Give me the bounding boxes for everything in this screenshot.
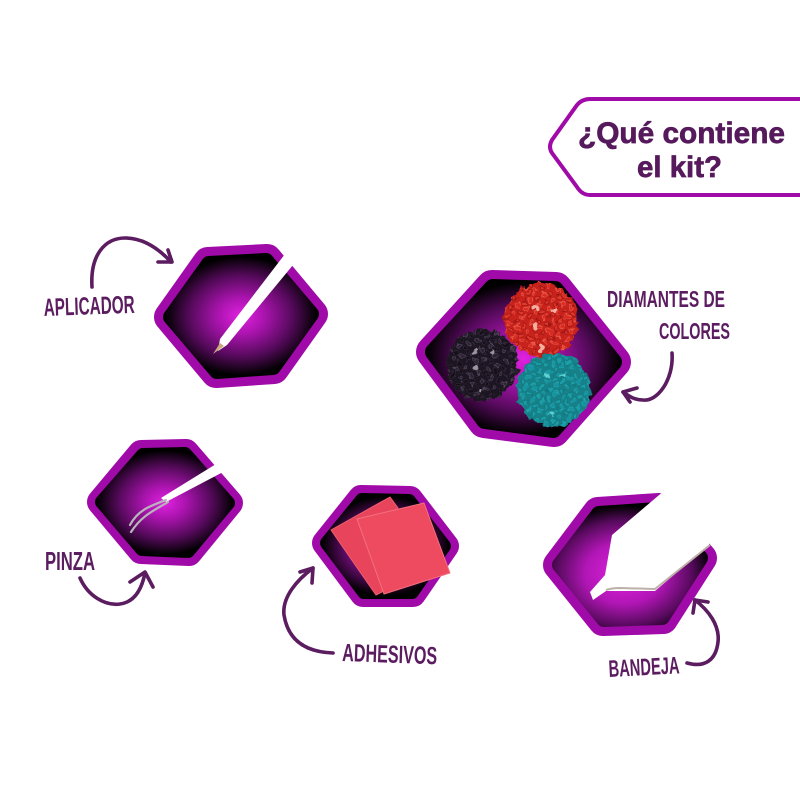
panel: diamantes de colores: COLORES <box>659 318 730 344</box>
icon: tweezers <box>130 464 225 532</box>
icon: front adhesive sheet <box>357 503 450 594</box>
label: ADHESIVOS <box>342 639 438 670</box>
tray edge <box>606 545 710 590</box>
hexagon frame <box>558 508 702 621</box>
panel: diamantes de colores <box>432 283 730 431</box>
arrow <box>80 572 153 604</box>
hexagon frame <box>325 498 446 594</box>
panel: aplicador <box>43 238 313 373</box>
hexagon glow <box>560 510 700 619</box>
icon: red gems <box>504 283 578 357</box>
hexagon glow <box>327 500 444 592</box>
panel: pinza <box>45 452 230 604</box>
label: BANDEJA <box>608 652 680 683</box>
label: PINZA <box>45 546 95 576</box>
icon: applicator pen <box>213 254 293 354</box>
arrow <box>623 353 672 402</box>
hexagon glow <box>102 454 228 551</box>
hexagon frame <box>169 259 313 373</box>
icon: white tray <box>590 480 722 600</box>
arrow <box>284 568 333 653</box>
label: APLICADOR <box>43 291 135 322</box>
arrow <box>687 600 718 664</box>
hexagon frame <box>432 286 615 431</box>
panel: bandeja <box>558 480 722 683</box>
icon: back adhesive sheet <box>331 497 398 595</box>
hexagon frame <box>100 452 230 553</box>
heading: ¿Qué contiene <box>578 117 785 150</box>
title banner: el kit? <box>637 151 722 184</box>
icon: teal gems <box>517 353 591 427</box>
title banner <box>550 99 800 195</box>
hexagon glow <box>434 288 613 429</box>
label: DIAMANTES DE <box>607 286 725 312</box>
banner outline <box>550 99 800 195</box>
icon: black gems <box>446 329 518 401</box>
panel: adhesivos <box>284 497 450 670</box>
arrow <box>92 238 172 287</box>
hexagon glow <box>171 261 311 371</box>
